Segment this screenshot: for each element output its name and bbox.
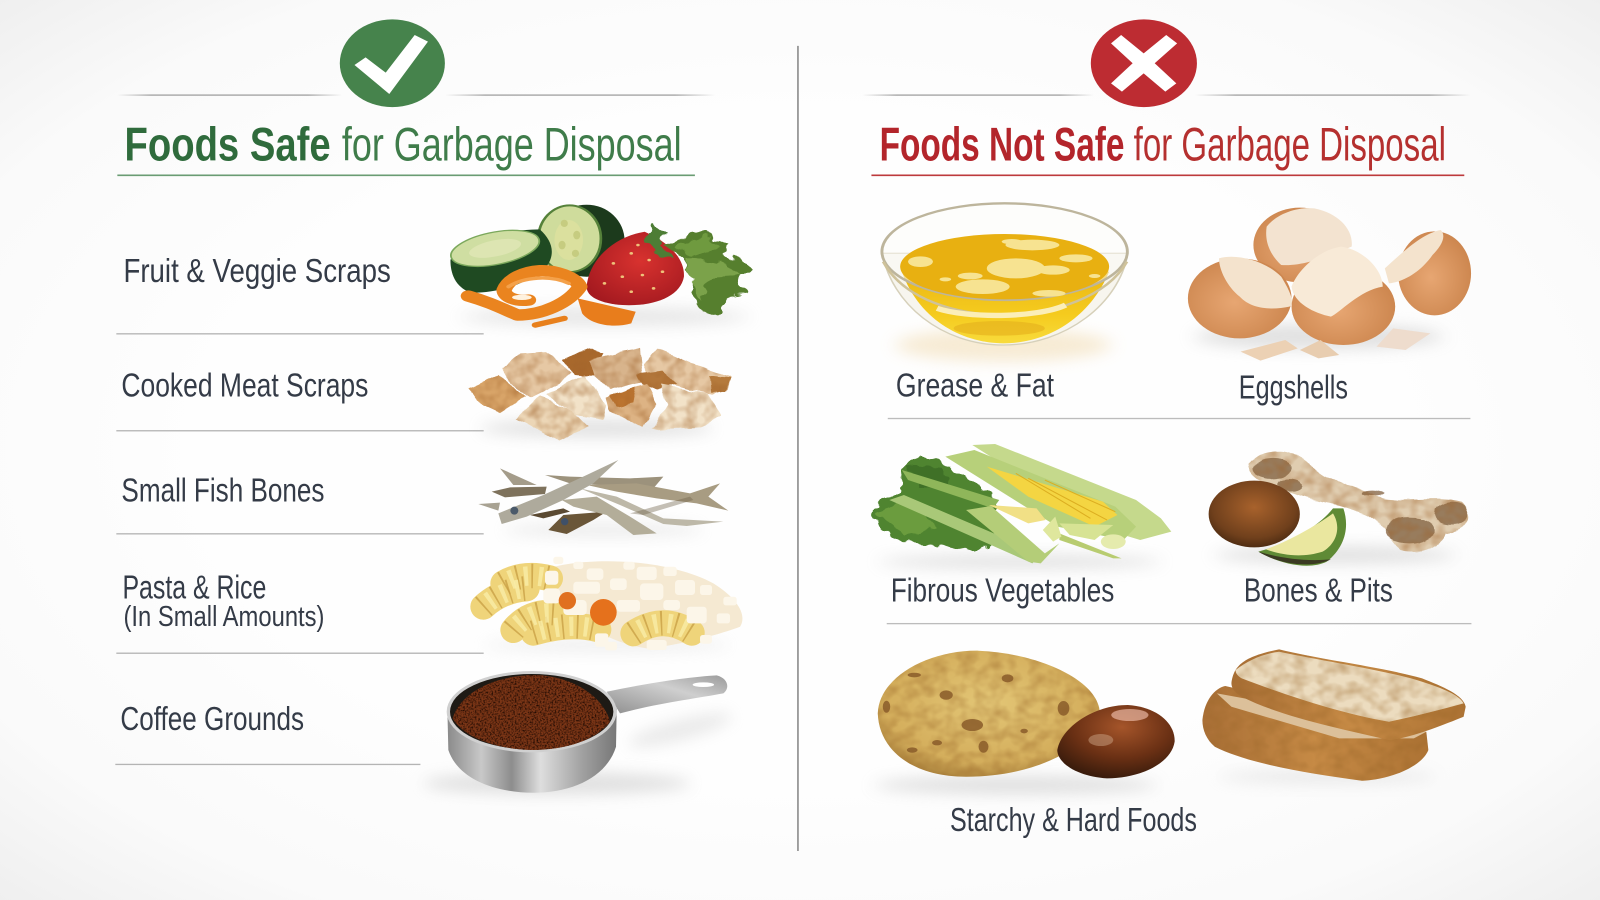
icon: green check: [340, 19, 445, 107]
heading rule: not safe: [862, 94, 1470, 96]
label: eggshells: Eggshells: [1239, 369, 1348, 406]
label: fibrous vegetables: Fibrous Vegetables: [891, 573, 1114, 610]
icon: red x: [1091, 19, 1197, 107]
image: small fish: [478, 460, 728, 536]
label: cooked meat scraps: Cooked Meat Scraps: [121, 367, 368, 404]
image: bowl of grease: [882, 203, 1128, 362]
heading underline: not safe: [871, 174, 1464, 176]
label: grease and fat: Grease & Fat: [896, 367, 1055, 404]
image: fibrous vegetables: [871, 444, 1171, 568]
panel: foods not safe: [862, 19, 1471, 839]
image: pasta and rice: [483, 557, 742, 652]
heading: safe: Foods Safe: [124, 119, 331, 171]
label: coffee grounds: Coffee Grounds: [120, 701, 304, 738]
image: cooked meat scraps: [468, 348, 730, 441]
heading rule: safe: [117, 94, 715, 96]
heading: not safe: Foods Not Safe: [880, 119, 1124, 171]
center divider: [797, 46, 799, 851]
heading: not safe: for Garbage Disposal: [1134, 119, 1446, 171]
label: bones and pits: Bones & Pits: [1244, 573, 1393, 610]
image: bones and pits: [1209, 450, 1469, 566]
heading: safe: [124, 119, 682, 171]
heading: safe: for Garbage Disposal: [342, 119, 682, 171]
heading: not safe: [880, 119, 1446, 171]
label: starchy and hard foods: Starchy & Hard Foods: [950, 802, 1197, 839]
image: fruit and veggie scraps: [445, 205, 754, 326]
label: pasta and rice: (In Small Amounts): [123, 601, 324, 633]
label: fruit and veggie scraps: Fruit & Veggie Scraps: [123, 253, 391, 290]
label: pasta and rice: [122, 569, 324, 633]
heading underline: safe: [117, 174, 695, 176]
panel: foods safe: [115, 19, 754, 795]
image: bread slices: [1202, 649, 1466, 783]
image: potato and pit: [875, 651, 1175, 794]
label: pasta and rice: Pasta & Rice: [122, 569, 266, 606]
image: eggshells: [1188, 208, 1471, 361]
image: coffee grounds in measuring cup: [423, 671, 734, 795]
label: small fish bones: Small Fish Bones: [121, 473, 324, 510]
